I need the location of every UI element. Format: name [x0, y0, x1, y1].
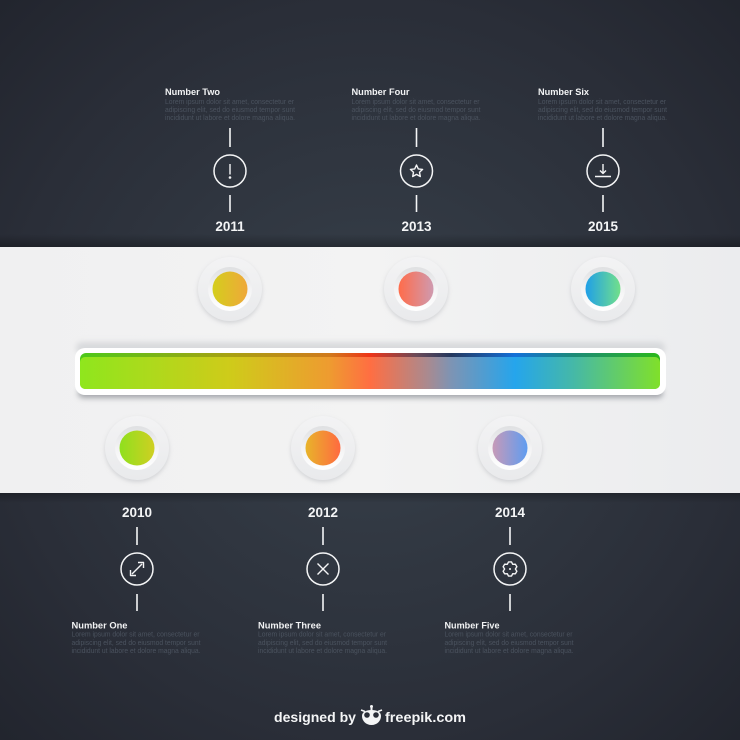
text block: Number Four: Number Four [352, 87, 410, 97]
text block: Number Two: incididunt ut labore et dolore magna aliqua. [165, 113, 295, 122]
year: 2015: 2015 [588, 219, 619, 234]
connector and icon: star 2013 [400, 128, 432, 212]
text block: Number Five: Number Five [444, 620, 500, 630]
year: 2012: 2012 [308, 505, 338, 520]
text block: Number Four: Lorem ipsum dolor sit amet, consectetur er [352, 97, 480, 106]
text block: Number One [72, 620, 200, 655]
text block: Number Six: adipiscing elit, sed do eiusmod tempor sunt [538, 105, 667, 114]
text block: Number Five: Lorem ipsum dolor sit amet, consectetur er [444, 630, 573, 638]
connector and icon: cross 2012 [307, 527, 339, 611]
year: 2014: 2014 [495, 505, 526, 520]
text block: Number One: Number One [72, 620, 128, 630]
connector and icon: exclamation 2011 [214, 128, 246, 212]
text block: Number Four: incididunt ut labore et dolore magna aliqua. [352, 113, 480, 122]
marker: 2014 [478, 416, 542, 482]
credit: designed by freepik.com [274, 705, 466, 725]
text block: Number Three [258, 620, 387, 655]
text block: Number Three: Lorem ipsum dolor sit amet, consectetur er [258, 630, 386, 638]
text block: Number Two: Lorem ipsum dolor sit amet, consectetur er [165, 97, 294, 106]
icon: freepik mascot [361, 705, 382, 725]
text block: Number Five: adipiscing elit, sed do eiusmod tempor sunt [444, 638, 574, 647]
text block: Number Three: adipiscing elit, sed do eiusmod tempor sunt [258, 638, 387, 647]
year: 2013: 2013 [401, 219, 432, 234]
connector and icon: download 2015 [587, 128, 619, 212]
text block: Number Six [538, 87, 667, 122]
credit: designed by freepik.com: freepik.com [385, 709, 466, 725]
text block: Number Three: Number Three [258, 620, 321, 630]
year: 2011: 2011 [215, 219, 245, 234]
marker: 2010 [105, 416, 169, 482]
marker: 2011 [198, 257, 262, 323]
marker: 2012 [291, 416, 355, 482]
text block: Number Five: incididunt ut labore et dolore magna aliqua. [444, 646, 574, 655]
year: 2010: 2010 [122, 505, 152, 520]
text block: Number Four [352, 87, 480, 122]
connector and icon: gear 2014 [494, 527, 526, 611]
timeline gradient bar [75, 342, 666, 398]
text block: Number Two [165, 87, 295, 122]
text block: Number Two: Number Two [165, 87, 220, 97]
marker: 2015 [571, 257, 635, 323]
text block: Number Six: Number Six [538, 87, 590, 97]
text block: Number Two: adipiscing elit, sed do eiusmod tempor sunt [165, 105, 295, 114]
text block: Number Five [444, 620, 574, 655]
text block: Number One: incididunt ut labore et dolore magna aliqua. [72, 646, 200, 655]
text block: Number One: Lorem ipsum dolor sit amet, consectetur er [72, 630, 200, 638]
text block: Number Six: incididunt ut labore et dolore magna aliqua. [538, 113, 667, 122]
text block: Number Three: incididunt ut labore et dolore magna aliqua. [258, 646, 387, 655]
marker: 2013 [384, 257, 448, 323]
text block: Number Four: adipiscing elit, sed do eiusmod tempor sunt [352, 105, 480, 114]
panel: light central band [0, 234, 740, 503]
credit: designed by freepik.com: designed by [274, 709, 356, 725]
connector and icon: expand arrows 2010 [121, 527, 153, 611]
text block: Number Six: Lorem ipsum dolor sit amet, consectetur er [538, 97, 666, 106]
text block: Number One: adipiscing elit, sed do eiusmod tempor sunt [72, 638, 200, 647]
